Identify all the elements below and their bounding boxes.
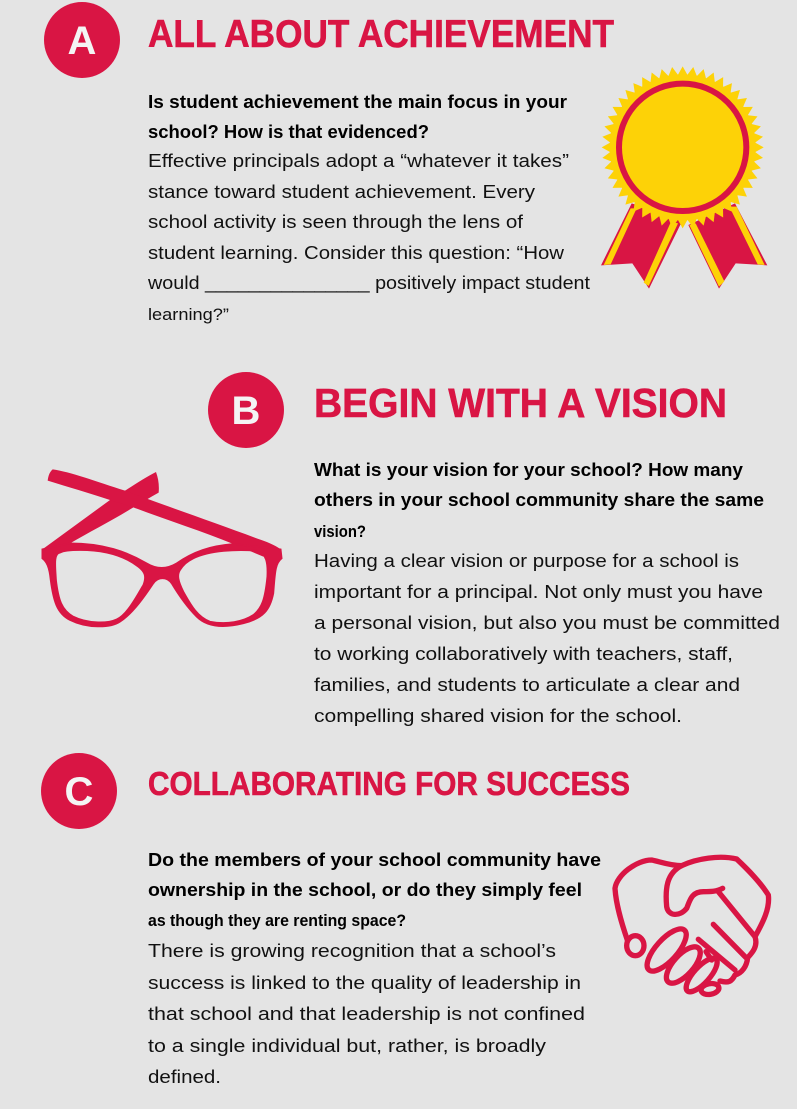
- text block: vision: Having a clear vision or purpose for a school is: [314, 551, 739, 571]
- badge: letter C: C: [65, 770, 93, 814]
- text block: achievement: [147, 92, 590, 324]
- text block: vision: others in your school community share the same: [314, 490, 764, 510]
- text block: vision: compelling shared vision for the school.: [314, 706, 682, 726]
- text block: collaboration: [148, 850, 601, 1087]
- heading: collaborating for success: COLLABORATING FOR SUCCESS: [148, 765, 630, 802]
- text block: collaboration: There is growing recognition that a school’s: [148, 941, 556, 961]
- heading: all about achievement: ALL ABOUT ACHIEVEMENT: [148, 13, 614, 56]
- panel: section C: [41, 753, 769, 1087]
- text block: vision: a personal vision, but also you must be committed: [314, 613, 780, 633]
- text block: collaboration: as though they are renting space?: [148, 912, 406, 930]
- panel: section B: [42, 372, 780, 726]
- text block: achievement: would _______________ positively impact student: [147, 273, 590, 294]
- text block: vision: [314, 460, 780, 726]
- heading: begin with a vision: BEGIN WITH A VISION: [314, 380, 727, 426]
- badge: letter A: A: [68, 19, 96, 63]
- badge: letter B: B: [232, 389, 260, 433]
- text block: collaboration: that school and that leadership is not confined: [148, 1004, 585, 1024]
- text block: collaboration: ownership in the school, or do they simply feel: [148, 880, 582, 900]
- text block: vision: vision?: [314, 523, 366, 541]
- text block: vision: families, and students to articulate a clear and: [314, 675, 740, 695]
- icon: handshake: [615, 857, 769, 996]
- text block: achievement: school activity is seen through the lens of: [148, 212, 524, 232]
- text block: collaboration: to a single individual but, rather, is broadly: [148, 1036, 546, 1056]
- text block: achievement: Is student achievement the main focus in your: [148, 92, 567, 112]
- text block: vision: important for a principal. Not only must you have: [314, 582, 763, 602]
- text block: achievement: learning?”: [148, 306, 229, 324]
- text block: achievement: student learning. Consider this question: “How: [148, 243, 565, 263]
- badge: letter B: [208, 372, 284, 448]
- text block: collaboration: defined.: [148, 1067, 221, 1087]
- text block: vision: to working collaboratively with teachers, staff,: [314, 644, 733, 664]
- text block: achievement: Effective principals adopt a “whatever it takes”: [148, 151, 569, 171]
- text block: collaboration: success is linked to the quality of leadership in: [148, 973, 581, 993]
- text block: collaboration: Do the members of your school community have: [148, 850, 601, 870]
- panel: section A: [44, 2, 775, 324]
- text block: achievement: school? How is that evidenced?: [148, 122, 429, 142]
- icon: glasses: [42, 469, 282, 626]
- text block: achievement: stance toward student achievement. Every: [148, 182, 535, 202]
- text block: vision: What is your vision for your school? How many: [314, 460, 743, 480]
- badge: letter C: [41, 753, 117, 829]
- icon: award rosette: [590, 55, 775, 289]
- badge: letter A: [44, 2, 120, 78]
